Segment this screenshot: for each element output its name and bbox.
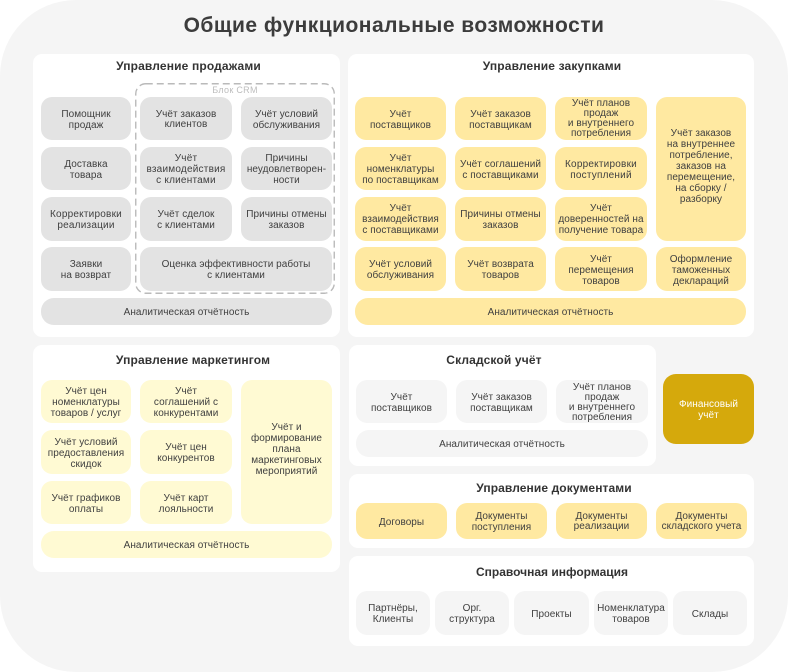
item bbox=[140, 197, 232, 241]
item: взаимодействия bbox=[362, 214, 439, 224]
item: Учёт bbox=[391, 392, 412, 402]
tall item: маркетинговых bbox=[251, 454, 322, 466]
item: поставщикам bbox=[469, 120, 532, 130]
item: Учёт заказов bbox=[470, 108, 531, 120]
item bbox=[41, 97, 131, 140]
item: товара bbox=[70, 170, 102, 180]
item: заказов bbox=[483, 220, 518, 231]
item bbox=[456, 503, 547, 539]
item bbox=[455, 97, 546, 140]
item: конкурентами bbox=[154, 408, 218, 419]
item: неудовлетворен- bbox=[247, 164, 326, 175]
item: получение товара bbox=[559, 224, 643, 236]
title: Общие функциональные возможности bbox=[184, 14, 604, 37]
tall item: формирование bbox=[251, 432, 322, 444]
item: оплаты bbox=[69, 504, 103, 514]
item: Склады bbox=[692, 608, 728, 620]
item: обслуживания bbox=[253, 120, 320, 130]
item: деклараций bbox=[673, 276, 729, 286]
panel: reference information bbox=[349, 556, 754, 646]
item bbox=[355, 97, 446, 140]
item: Учёт bbox=[390, 108, 411, 120]
item bbox=[455, 147, 546, 190]
item: предоставления bbox=[48, 448, 124, 458]
item: доверенностей на bbox=[558, 214, 644, 224]
item: поставщиков bbox=[371, 402, 432, 414]
item bbox=[241, 97, 332, 140]
item bbox=[241, 147, 332, 190]
item: с клиентами bbox=[157, 220, 215, 231]
item: Оценка эффективности работы bbox=[162, 259, 310, 270]
item bbox=[140, 481, 232, 524]
tall item: разборку bbox=[680, 194, 722, 205]
item bbox=[356, 380, 447, 423]
item bbox=[555, 197, 647, 241]
item: Учёт bbox=[390, 153, 411, 164]
analytics bar: Аналитическая отчётность bbox=[124, 307, 249, 318]
item: Партнёры, bbox=[368, 603, 418, 614]
panel: marketing management bbox=[33, 345, 340, 572]
item: продаж bbox=[69, 120, 103, 130]
item bbox=[355, 197, 446, 241]
item: продаж bbox=[585, 392, 619, 403]
item bbox=[556, 503, 647, 539]
item: поступлений bbox=[570, 170, 632, 180]
item bbox=[41, 380, 131, 423]
analytics bar: Аналитическая отчётность bbox=[439, 439, 565, 450]
item: Учёт условий bbox=[369, 259, 432, 270]
tall item: плана bbox=[272, 444, 301, 454]
item bbox=[140, 147, 232, 190]
item: Документы bbox=[676, 511, 728, 522]
item bbox=[456, 380, 547, 423]
item bbox=[41, 197, 131, 241]
item: реализации bbox=[57, 220, 115, 231]
item bbox=[41, 430, 131, 474]
item: Договоры bbox=[379, 516, 424, 528]
tall item bbox=[241, 380, 332, 524]
item: потребления bbox=[572, 412, 632, 423]
CRM label: Блок CRM bbox=[212, 85, 258, 95]
tall item: потребление, bbox=[669, 150, 733, 161]
item: поставщиков bbox=[370, 120, 431, 130]
item: Документы bbox=[576, 511, 628, 522]
analytics bar bbox=[41, 298, 332, 325]
heading: sales: Управление продажами bbox=[116, 59, 261, 73]
item: Причины отмены bbox=[246, 209, 327, 220]
item: по поставщикам bbox=[362, 175, 439, 186]
tall item: на внутреннее bbox=[667, 139, 735, 150]
item: Корректировки bbox=[565, 158, 637, 170]
item bbox=[435, 591, 509, 635]
item: клиентов bbox=[165, 118, 207, 130]
item: Учёт bbox=[390, 202, 411, 214]
item: товаров / услуг bbox=[51, 408, 121, 419]
item: конкурентов bbox=[157, 453, 215, 464]
item: Клиенты bbox=[373, 614, 413, 625]
item bbox=[356, 591, 430, 635]
item bbox=[140, 430, 232, 474]
item: скидок bbox=[70, 458, 102, 470]
item: перемещения bbox=[568, 264, 634, 276]
item bbox=[555, 247, 647, 291]
heading: marketing: Управление маркетингом bbox=[116, 353, 270, 367]
item bbox=[356, 503, 447, 539]
item bbox=[355, 147, 446, 190]
item: Учёт условий bbox=[54, 436, 117, 448]
item: поставщикам bbox=[470, 402, 533, 414]
item: с поставщиками bbox=[462, 170, 539, 180]
item: лояльности bbox=[159, 504, 213, 514]
item: таможенных bbox=[672, 264, 730, 276]
item bbox=[673, 591, 747, 635]
item bbox=[41, 247, 131, 291]
item: Причины bbox=[265, 153, 308, 164]
item: реализации bbox=[574, 521, 629, 532]
item: складского учета bbox=[662, 521, 741, 532]
item: Учёт цен bbox=[165, 442, 207, 453]
item: Документы bbox=[476, 511, 528, 522]
analytics bar bbox=[356, 430, 648, 457]
item: номенклатуры bbox=[52, 397, 120, 408]
item: Учёт цен bbox=[65, 386, 107, 397]
item: номенклатуры bbox=[367, 164, 434, 175]
analytics bar: Аналитическая отчётность bbox=[488, 307, 613, 318]
item bbox=[594, 591, 668, 635]
item: Учёт bbox=[175, 153, 197, 164]
analytics bar: Аналитическая отчётность bbox=[124, 540, 249, 551]
item bbox=[555, 147, 647, 190]
panel: warehouse accounting bbox=[349, 345, 656, 466]
item bbox=[656, 503, 747, 539]
item: Заявки bbox=[70, 259, 102, 270]
tall item: Учёт и bbox=[271, 422, 302, 432]
item: и внутреннего bbox=[569, 402, 635, 413]
item: Учёт заказов bbox=[156, 108, 216, 120]
item: продаж bbox=[584, 108, 618, 118]
item: с клиентами bbox=[156, 175, 216, 186]
panel: document management bbox=[349, 474, 754, 548]
tall item: мероприятий bbox=[256, 466, 317, 476]
item: ности bbox=[273, 175, 300, 186]
heading: documents: Управление документами bbox=[476, 481, 632, 495]
item: Учёт сделок bbox=[158, 209, 214, 220]
item: Корректировки bbox=[50, 209, 122, 220]
CRM block bbox=[135, 83, 335, 294]
item: Учёт графиков bbox=[51, 492, 121, 504]
analytics bar bbox=[41, 531, 332, 558]
item: потребления bbox=[571, 128, 631, 138]
item bbox=[455, 247, 546, 291]
tall item: перемещение, bbox=[667, 172, 735, 183]
heading: warehouse: Складской учёт bbox=[446, 353, 542, 367]
item: Учёт заказов bbox=[471, 392, 532, 402]
item: соглашений с bbox=[154, 397, 218, 408]
item: на возврат bbox=[61, 270, 111, 281]
item: Учёт возврата bbox=[467, 259, 534, 270]
heading: purchasing: Управление закупками bbox=[483, 59, 621, 73]
item: товаров bbox=[482, 270, 519, 281]
item: Проекты bbox=[531, 608, 572, 620]
item: Учёт планов bbox=[573, 382, 631, 393]
item: Оформление bbox=[670, 254, 732, 264]
item: Причины отмены bbox=[460, 209, 541, 220]
item: Учёт условий bbox=[255, 108, 318, 120]
tall item: заказов на bbox=[676, 161, 726, 172]
heading: reference: Справочная информация bbox=[476, 565, 628, 579]
tall item: Учёт заказов bbox=[671, 128, 731, 139]
item: обслуживания bbox=[367, 270, 434, 281]
item: Учёт bbox=[175, 386, 197, 397]
panel: financial accounting: учёт bbox=[698, 410, 719, 421]
item: и внутреннего bbox=[568, 118, 634, 128]
item bbox=[140, 380, 232, 423]
item: Учёт соглашений bbox=[460, 158, 541, 170]
item: с клиентами bbox=[207, 270, 265, 281]
item: Орг. bbox=[463, 603, 481, 614]
item bbox=[514, 591, 589, 635]
panel: sales management bbox=[33, 54, 340, 337]
panel: financial accounting: Финансовый bbox=[679, 399, 738, 410]
item: Номенклатура bbox=[597, 603, 665, 614]
item bbox=[41, 147, 131, 190]
panel: purchasing management bbox=[348, 54, 754, 337]
item bbox=[140, 97, 232, 140]
item: с поставщиками bbox=[362, 224, 439, 236]
panel: financial accounting bbox=[663, 374, 754, 444]
item bbox=[555, 97, 647, 140]
item: заказов bbox=[269, 220, 304, 231]
item: Учёт bbox=[590, 254, 612, 264]
item bbox=[140, 247, 332, 291]
analytics bar bbox=[355, 298, 746, 325]
item: Помощник bbox=[61, 108, 111, 120]
item: взаимодействия bbox=[146, 164, 226, 175]
item bbox=[241, 197, 332, 241]
item bbox=[455, 197, 546, 241]
item bbox=[355, 247, 446, 291]
item: товаров bbox=[612, 614, 650, 625]
item: Учёт планов bbox=[572, 98, 630, 108]
tall item bbox=[656, 97, 746, 241]
item: товаров bbox=[582, 276, 620, 286]
item bbox=[556, 380, 648, 423]
item: Доставка bbox=[64, 158, 108, 170]
item bbox=[656, 247, 746, 291]
item: Учёт карт bbox=[163, 492, 208, 504]
item: структура bbox=[449, 614, 495, 625]
item: поступления bbox=[472, 522, 531, 533]
item bbox=[41, 481, 131, 524]
tall item: на сборку / bbox=[675, 183, 727, 194]
item: Учёт bbox=[590, 202, 612, 214]
